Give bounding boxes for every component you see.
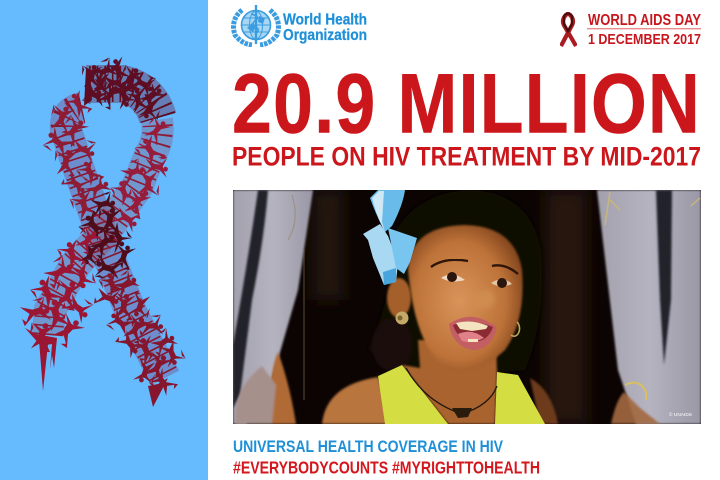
photo background: [312, 190, 587, 424]
ribbon top loop: [79, 56, 167, 122]
organization name: [283, 12, 367, 44]
photo: smiling girl between curtains: [233, 190, 701, 424]
organization name: Organization: [283, 27, 367, 44]
event date: 1 DECEMBER 2017: [588, 31, 701, 48]
ribbon lattice base: [48, 84, 165, 378]
ribbon lower right tail: [93, 269, 186, 407]
hair bow: [363, 190, 417, 285]
nose: [481, 292, 494, 306]
logo: World Health Organization: [234, 5, 367, 45]
yellow top: [378, 365, 545, 424]
ear: [387, 278, 411, 318]
right curtain: [597, 190, 701, 424]
icon: small red ribbon: [561, 14, 576, 46]
eyebrows: [431, 260, 518, 274]
icon: WHO emblem: [234, 5, 278, 45]
panel: blue sidebar: [0, 0, 208, 480]
necklace: [406, 368, 497, 418]
shoulders and neck: [322, 340, 558, 424]
icon: red ribbon made of human figures: [19, 56, 186, 407]
ribbon crossing: [77, 191, 137, 284]
eyes: [441, 272, 512, 288]
footer heading: UNIVERSAL HEALTH COVERAGE IN HIV: [233, 438, 503, 456]
left curtain: [233, 190, 313, 424]
ribbon right loop strand: [110, 114, 172, 233]
hair: [368, 190, 542, 378]
face: [408, 225, 523, 371]
ribbon left loop strand: [41, 89, 113, 221]
organization name: World Health: [283, 12, 367, 28]
earrings: [396, 312, 520, 336]
smile: [449, 317, 496, 350]
event badge: World AIDS Day: [561, 12, 701, 48]
photo credit: © UNAIDS: [669, 411, 692, 418]
left hand: [236, 352, 296, 424]
footer hashtags: #EVERYBODYCOUNTS #MYRIGHTTOHEALTH: [233, 458, 540, 478]
ribbon lower left tail: [19, 224, 103, 391]
right hand: [611, 392, 660, 424]
